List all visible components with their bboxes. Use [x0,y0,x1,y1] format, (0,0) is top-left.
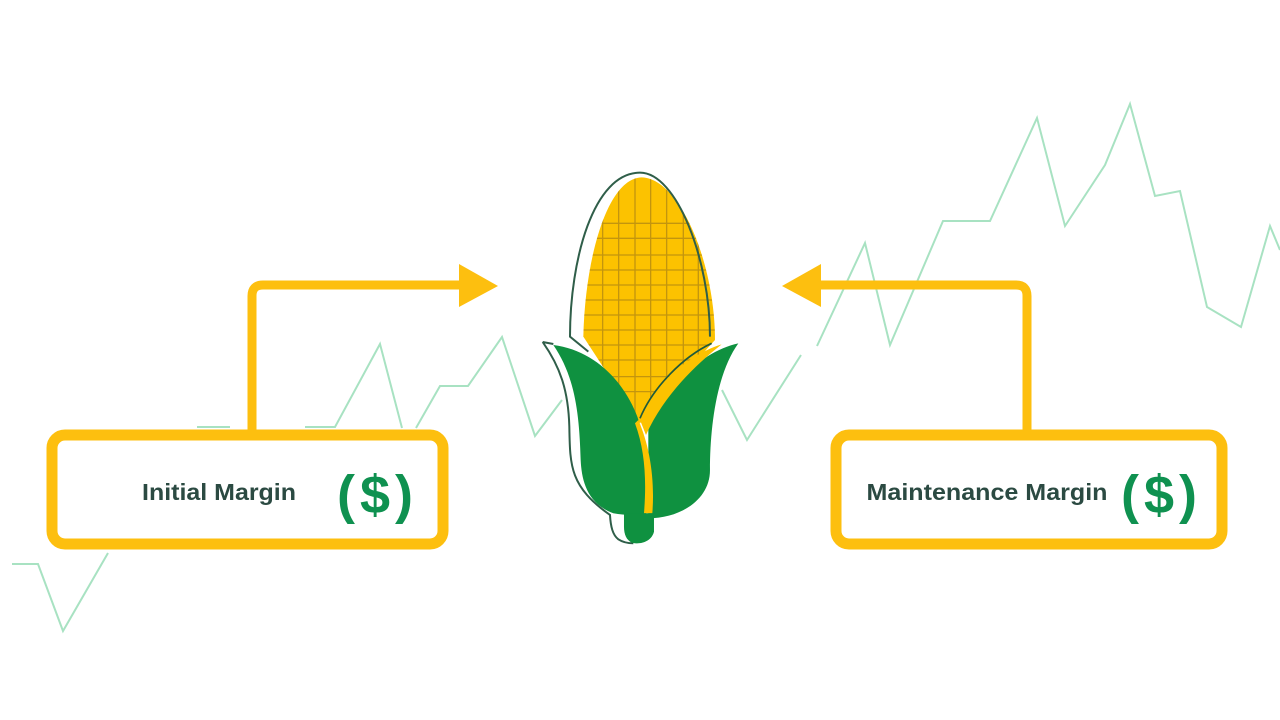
yellow husk edge [639,344,722,435]
yellow centre stripe [635,420,653,513]
panel: maintenance margin [836,435,1222,544]
panel: initial margin [52,435,443,544]
label: initial margin: Initial Margin [142,479,296,505]
left connector arrow [252,264,498,432]
kernel grid [584,178,715,413]
right connector arrow [782,264,1027,432]
price line chart [12,104,1280,631]
right husk leaf [648,343,738,518]
icon: dollar in parentheses: ($) [1121,465,1197,525]
husk outline [570,173,710,352]
label: maintenance margin: Maintenance Margin [866,479,1108,505]
left husk outline [543,342,633,543]
stem [624,513,654,543]
icon: dollar in parentheses: ($) [337,465,413,525]
corn kernels [583,177,715,423]
icon: corn cob [543,173,738,543]
left husk leaf [553,345,647,515]
infographic canvas [12,101,1280,634]
